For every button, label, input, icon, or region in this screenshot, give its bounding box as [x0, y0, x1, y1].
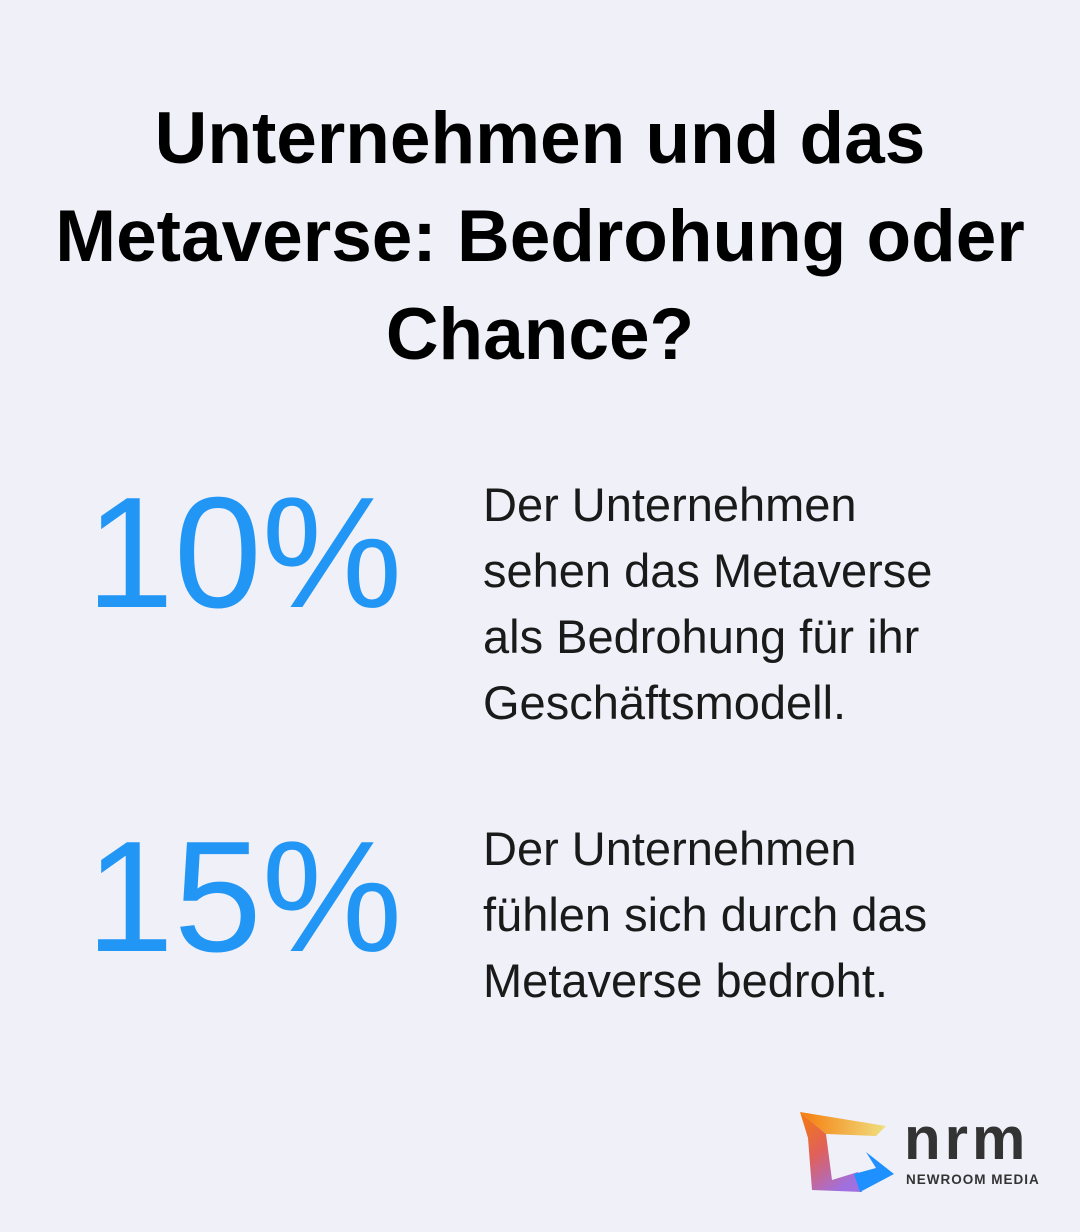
title: Metaverse: Bedrohung oder — [55, 196, 1025, 277]
text: 10% description: Geschäftsmodell. — [483, 676, 846, 729]
title — [55, 98, 1025, 375]
text: 15% description — [483, 822, 927, 1007]
title: Unternehmen und das — [155, 98, 925, 179]
text: nrm: nrm — [904, 1105, 1029, 1172]
text: 10% description — [483, 478, 932, 729]
text: 15% description: Metaverse bedroht. — [483, 954, 888, 1007]
icon: logo mark — [800, 1112, 894, 1192]
text: 15% description: Der Unternehmen — [483, 822, 857, 875]
text: 15% description: fühlen sich durch das — [483, 888, 927, 941]
text: 10% description: Der Unternehmen — [483, 478, 857, 531]
stat: 10%: 10% — [86, 465, 402, 641]
text: 10% description: als Bedrohung für ihr — [483, 610, 919, 663]
logo — [800, 1105, 1040, 1192]
text: 10% description: sehen das Metaverse — [483, 544, 932, 597]
text: NEWROOM MEDIA: NEWROOM MEDIA — [906, 1172, 1040, 1187]
stat: 15%: 15% — [86, 809, 402, 985]
title: Chance? — [386, 294, 694, 375]
